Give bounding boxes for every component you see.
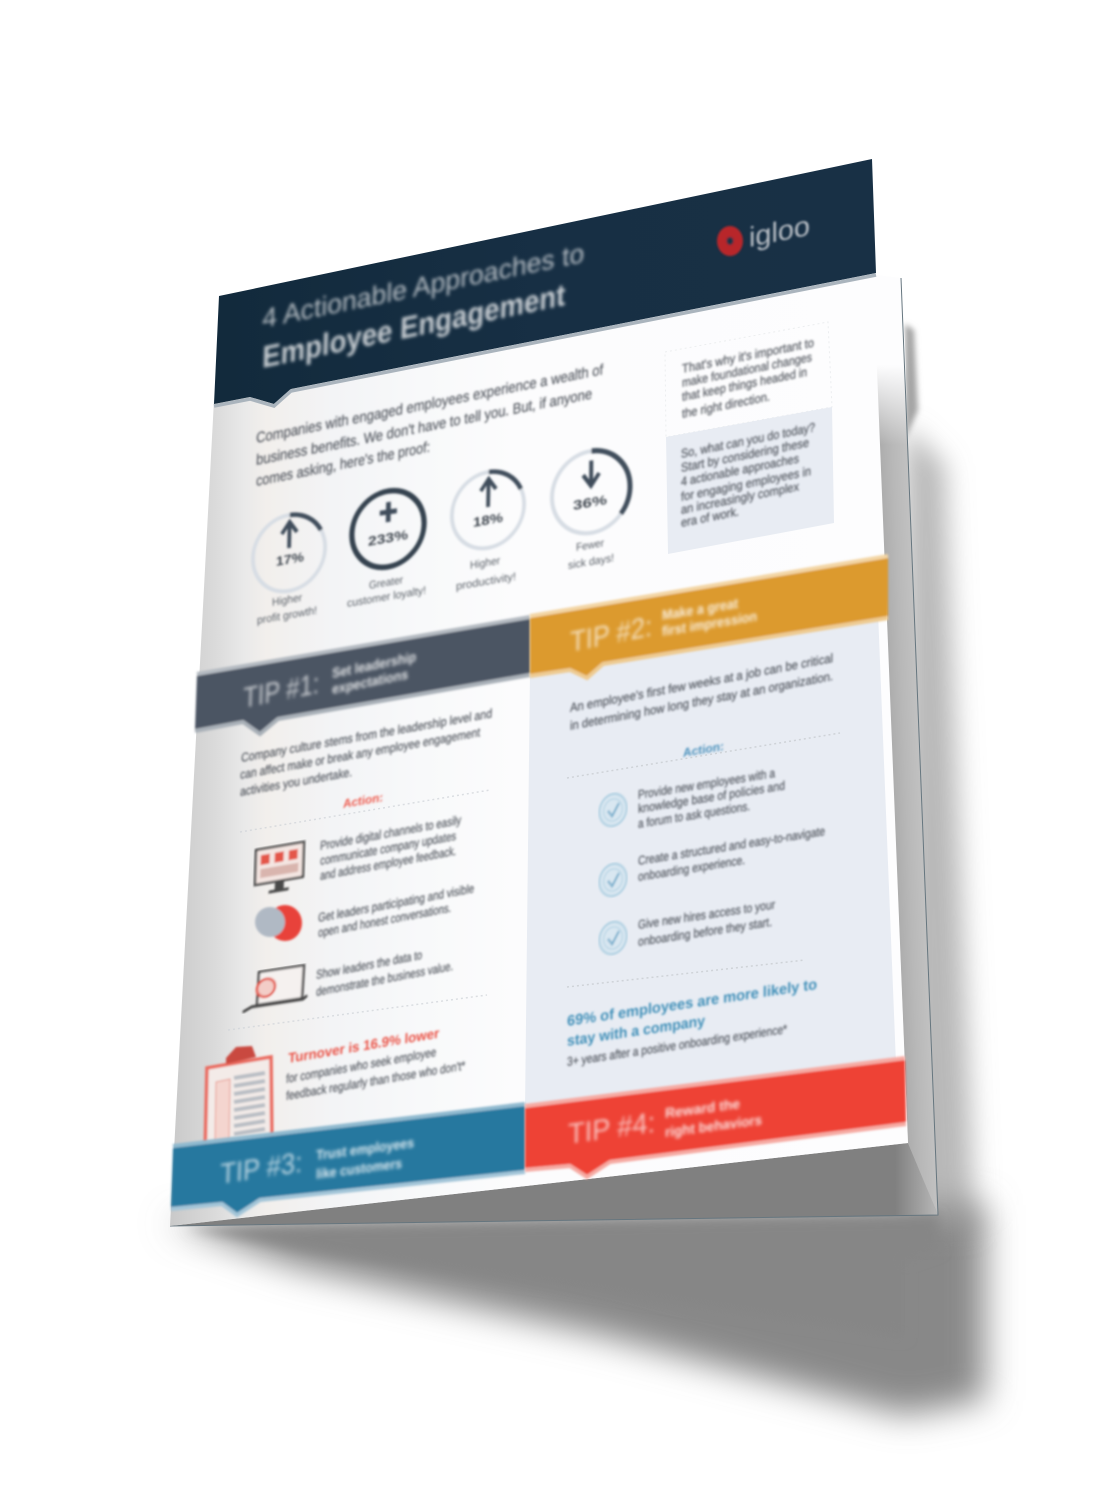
text: action 1: a forum to ask questions.: [638, 799, 750, 831]
stat: 17% higher profit growth: [252, 510, 326, 627]
stat circles: [252, 446, 630, 627]
text: action 2: open and honest conversations.: [318, 901, 451, 940]
logo: igloo: [717, 209, 810, 256]
tip 2 band: Make a great: [662, 595, 738, 623]
icon: monitor: [255, 842, 304, 896]
text: action 3: Give new hires access to your: [638, 898, 775, 932]
text: tip 1 intro: Company culture stems from the leadership level and: [241, 706, 492, 765]
tip 2 band: TIP #2:: [570, 610, 652, 659]
text: action 3: [638, 898, 775, 949]
callout box: [666, 407, 834, 554]
text: why it matters: make foundational changes: [682, 350, 812, 390]
stat: 36% fewer sick days: Fewer: [576, 537, 604, 554]
stat: 17% higher profit growth: 17%: [276, 549, 304, 569]
title: Employee Engagement: [262, 277, 566, 375]
panel: tip 2 light blue background: [525, 612, 896, 1110]
header band: [214, 159, 876, 406]
text: action 3: Show leaders the data to: [316, 948, 422, 982]
stat: onboarding: [567, 976, 817, 1069]
text: action 3: onboarding before they start.: [638, 915, 772, 949]
text: why it matters: that keep things headed in: [682, 365, 807, 404]
stat: 36% fewer sick days: 36%: [573, 492, 607, 513]
stat: 17% higher profit growth: profit growth!: [257, 605, 317, 627]
stat: onboarding: 69% of employees are more likely to: [567, 976, 817, 1030]
stat: 18% higher productivity: productivity!: [456, 571, 516, 593]
text: action 1: [320, 813, 462, 883]
cast shadow: [165, 324, 985, 1415]
intro text: [256, 361, 604, 490]
text: why it matters: [665, 322, 832, 437]
text: action 3: demonstrate the business value.: [316, 959, 453, 999]
tip 4 band: TIP #4:: [568, 1107, 655, 1151]
icon: check badge 2: [599, 862, 627, 898]
text: tip 1 intro: can affect make or break any employee engagement: [240, 725, 481, 782]
stat: onboarding: 3+ years after a positive onboarding experience*: [567, 1022, 787, 1069]
text: why it matters: That's why it's important to: [682, 336, 814, 376]
stat: 18% higher productivity: 18%: [473, 510, 503, 530]
text: action 2: Get leaders participating and visible: [318, 881, 474, 925]
callout box: 4 actionable approaches: [681, 452, 799, 489]
text: why it matters: the right direction.: [682, 390, 770, 421]
text: action 1: knowledge base of policies and: [638, 779, 785, 816]
text: action 1: Provide digital channels to easily: [320, 813, 462, 853]
heading: action: Action:: [343, 790, 383, 811]
panel: tip 1 body: [205, 706, 492, 1158]
icon: laptop: [243, 964, 309, 1012]
tip 3 band: Trust employees: [316, 1134, 415, 1163]
tip 2 band: [530, 556, 888, 678]
text: action 2: Create a structured and easy-to-navigate: [638, 824, 825, 868]
callout box: an increasingly complex: [681, 479, 800, 517]
heading: action: Action:: [683, 739, 724, 760]
stat: onboarding: stay with a company: [567, 1013, 706, 1050]
panel: tip 2 body: [567, 651, 840, 1069]
tip 2 band: first impression: [662, 608, 757, 639]
tip 1 band: Set leadership: [332, 648, 417, 681]
intro text: comes asking, here's the proof:: [256, 439, 430, 490]
intro text: Companies with engaged employees experience a wealth of: [256, 361, 604, 447]
text: tip 2 intro: An employee's first few weeks at a job can be critical: [570, 651, 833, 715]
tip 4 band: right behaviors: [665, 1111, 762, 1140]
text: tip 1 intro: [240, 706, 492, 799]
stat: turnover: feedback regularly than those who don't*: [286, 1059, 466, 1103]
front page sheet: [170, 273, 908, 1226]
stat: 18% higher productivity: [451, 467, 525, 593]
tip 4 band: Reward the: [665, 1095, 740, 1121]
stat: turnover: [286, 1025, 466, 1103]
icon: check badge 3: [599, 920, 627, 956]
icon: speech bubbles: [255, 905, 302, 941]
title: 4 Actionable Approaches to: [262, 237, 585, 334]
stat: 233% greater customer loyalty: 233%: [368, 527, 408, 549]
stat: 36% fewer sick days: sick days!: [568, 552, 614, 572]
text: tip 2 intro: in determining how long they stay at an organization.: [570, 669, 833, 733]
callout box: So, what can you do today?: [681, 420, 815, 461]
icon: check badge 1: [599, 792, 627, 828]
tip 3 band: like customers: [316, 1155, 403, 1182]
callout box: for engaging employees in: [681, 464, 811, 504]
tip 1 band: [195, 617, 530, 734]
icon: clipboard: [205, 1046, 272, 1158]
text: action 1: [638, 766, 785, 831]
tip 3 band: TIP #3:: [220, 1147, 303, 1191]
stat: turnover: for companies who seek employee: [286, 1045, 436, 1086]
text: action 1: and address employee feedback.: [320, 844, 456, 883]
stat: 18% higher productivity: Higher: [470, 555, 500, 572]
stat: 36% fewer sick days: [552, 446, 630, 572]
stat: turnover: Turnover is 16.9% lower: [288, 1025, 440, 1066]
tip 1 band: TIP #1:: [243, 667, 320, 715]
intro text: business benefits. We don't have to tell you. But, if anyone: [256, 386, 592, 469]
tip 1 band: expectations: [332, 666, 409, 697]
callout box: era of work.: [681, 505, 739, 530]
text: action 2: onboarding experience.: [638, 853, 745, 884]
tip 3 band: [171, 1104, 525, 1215]
stat: 233% greater customer loyalty: Greater: [369, 574, 403, 592]
text: action 2: [638, 824, 825, 884]
back cover sliver and underside: [170, 275, 938, 1226]
text: action 1: Provide new employees with a: [638, 766, 775, 802]
stat: 233% greater customer loyalty: customer loyalty!: [347, 585, 426, 610]
stat: 233% greater customer loyalty: [347, 486, 426, 610]
text: tip 1 intro: activities you undertake.: [240, 765, 352, 799]
callout box: Start by considering these: [681, 436, 809, 475]
tip 4 band: [525, 1058, 906, 1177]
logo: igloo: igloo: [749, 209, 810, 253]
text: action 1: communicate company updates: [320, 829, 456, 868]
stat: 17% higher profit growth: Higher: [272, 592, 302, 609]
